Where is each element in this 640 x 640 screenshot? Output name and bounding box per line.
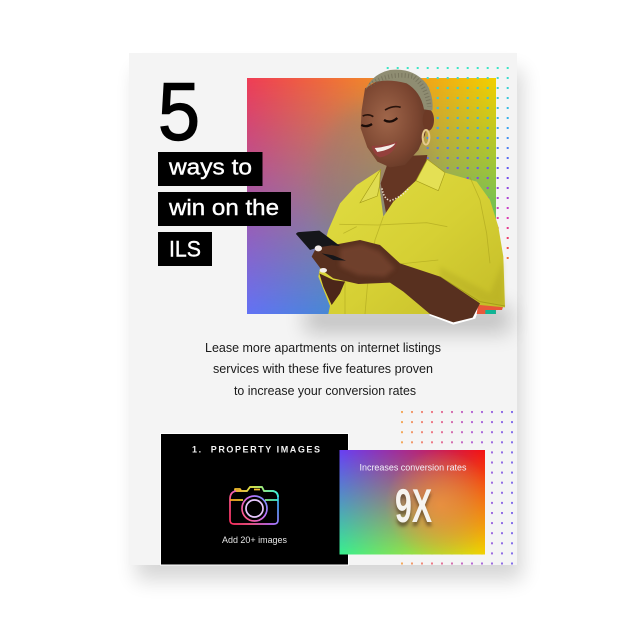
page shadow [136, 70, 522, 580]
neck [381, 155, 427, 217]
sticker edge [429, 290, 480, 325]
eyebrows [363, 107, 401, 117]
hair [365, 70, 433, 111]
shirt [318, 159, 505, 314]
hand and forearm [312, 240, 480, 322]
icon: camera [230, 487, 278, 524]
eyes [361, 118, 397, 126]
phone [296, 231, 340, 250]
sleeve shade [440, 260, 503, 305]
panel: conversion rate callout [340, 450, 485, 554]
intro paragraph: services with these five features proven [213, 361, 433, 376]
number 5: 5 [158, 66, 200, 158]
heading: ILS [158, 232, 212, 266]
teal corner and sleeve lining [477, 304, 503, 314]
head [361, 78, 429, 167]
shirt shading [333, 177, 490, 314]
heading: ways to [158, 152, 262, 186]
infographic poster [128, 53, 530, 588]
earring [423, 130, 429, 145]
poster page [129, 53, 517, 565]
dot grid: top right [386, 66, 510, 263]
phone lower edge [322, 253, 346, 261]
gradient photo panel [247, 78, 496, 314]
gradient shading behind woman [317, 103, 430, 257]
photo panel shadow [305, 305, 510, 333]
statistic shadow: 9X [395, 483, 432, 536]
heading: win on the [158, 192, 291, 226]
necklace [382, 187, 409, 201]
hand highlight [340, 244, 395, 277]
intro paragraph: to increase your conversion rates [234, 383, 416, 398]
dot grid: bottom right [400, 410, 516, 566]
ear [423, 109, 434, 131]
panel heading: 1. PROPERTY IMAGES [192, 444, 320, 454]
fingernails [315, 245, 327, 273]
smile [372, 141, 397, 157]
intro paragraph: Lease more apartments on internet listings [205, 340, 441, 355]
heading: win on the: win on the [168, 195, 279, 220]
panel: property images [160, 434, 348, 565]
woman holding phone [296, 70, 505, 325]
panel caption: Add 20+ images [222, 535, 287, 545]
heading: ways to: ways to [168, 154, 252, 180]
arm under phone [319, 273, 345, 305]
statistic: 9X: 9X [395, 479, 432, 532]
intro paragraph [205, 340, 441, 398]
sleeve cuff [440, 277, 505, 306]
hair texture [370, 75, 429, 107]
callout label: Increases conversion rates [360, 462, 467, 472]
collar [360, 169, 381, 203]
heading: ILS: ILS [169, 236, 201, 262]
